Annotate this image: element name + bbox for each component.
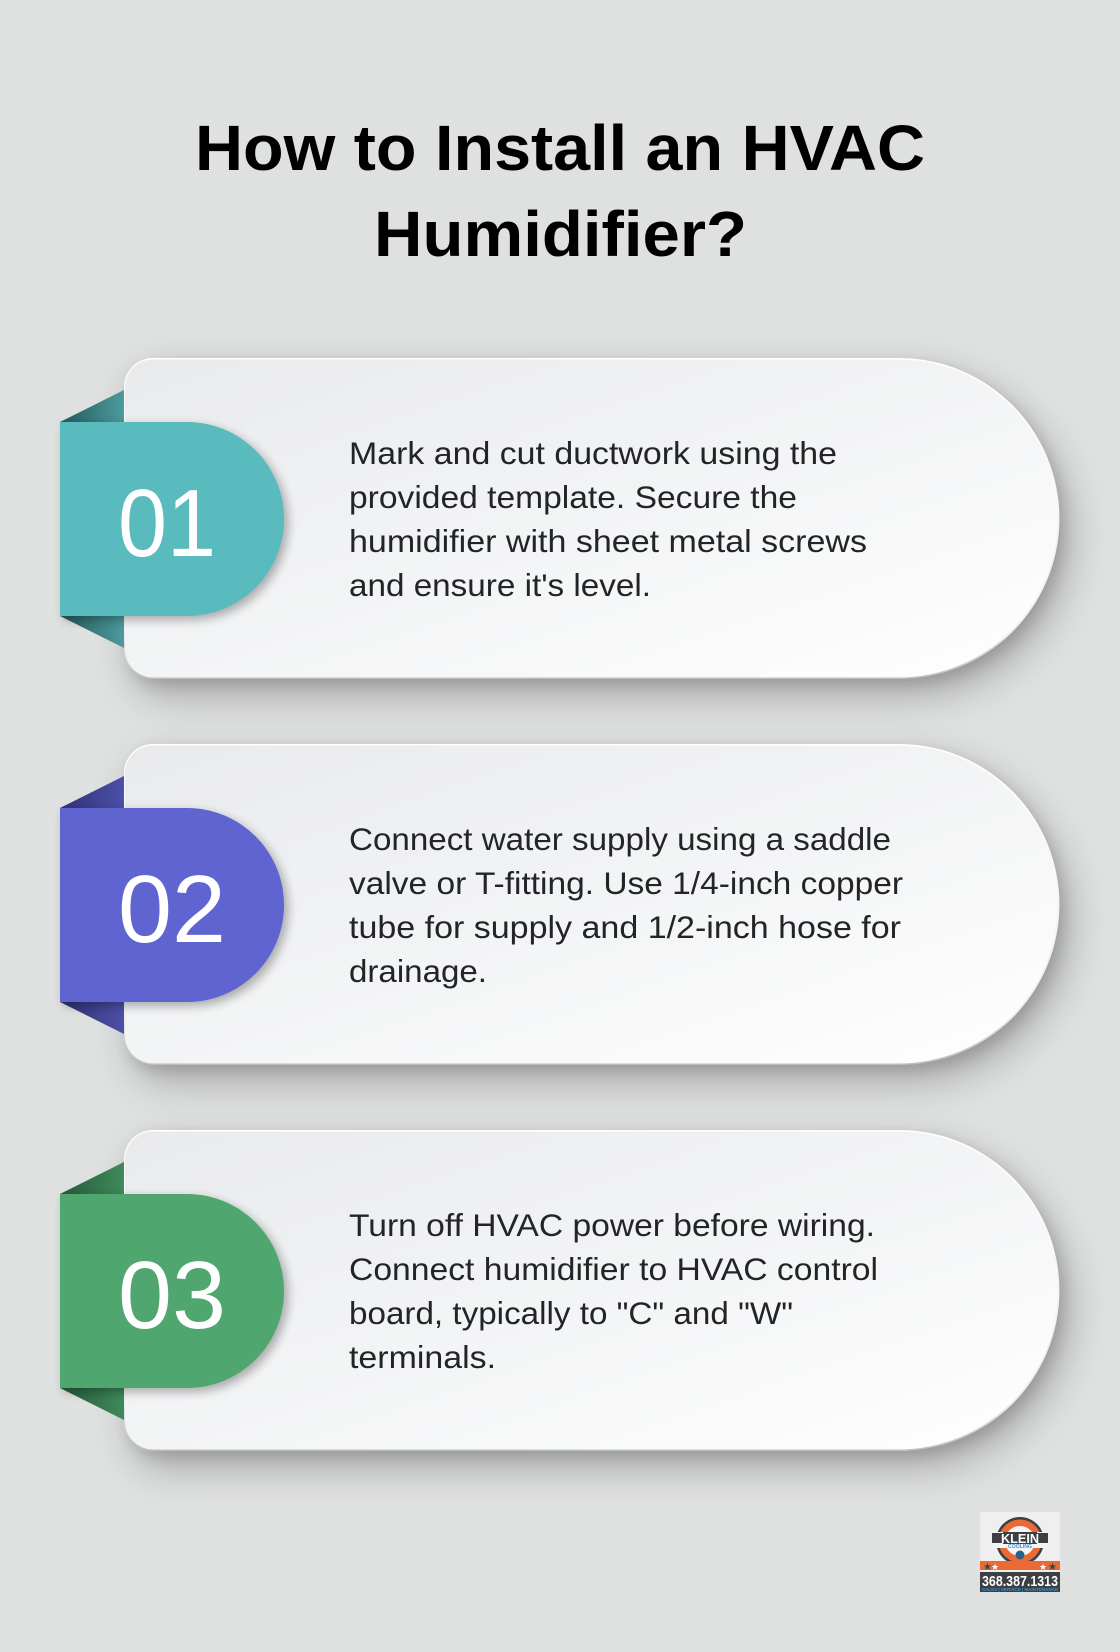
card: step 1 [124,358,1059,679]
text: step 1: Mark and cut ductwork using the [349,435,837,471]
badge: 02: 02 [118,856,226,963]
text: step 3: Connect humidifier to HVAC control [349,1251,878,1287]
title [195,112,925,270]
logo: Klein Cooling: 368.387.1313 [982,1573,1058,1590]
badge: 02 [60,808,288,1006]
badge: 03: 03 [118,1242,226,1349]
title: Humidifier? [374,198,747,270]
text: step 3: terminals. [349,1339,496,1375]
panel: step 2 [60,744,1069,1081]
title: How to Install an HVAC [195,112,925,184]
logo: Klein Cooling: ★ [1039,1562,1047,1572]
logo: Klein Cooling: COOLING [1008,1544,1032,1550]
card: step 3 [124,1130,1059,1451]
logo: Klein Cooling: ★ [983,1562,992,1573]
text: step 1: and ensure it's level. [349,567,651,603]
logo: Klein Cooling: SALES | SERVICE | MAINTENANCE [982,1587,1058,1592]
logo: Klein Cooling: ★ [991,1562,999,1572]
text: step 2: valve or T-fitting. Use 1/4-inch copper [349,865,903,901]
fold: step 3 ribbon [60,1162,124,1420]
badge: 01: 01 [118,470,216,577]
text: step 2 [349,821,903,989]
fold: step 2 ribbon [60,776,124,1034]
text: step 1: humidifier with sheet metal screws [349,523,867,559]
card: step 2 [124,744,1059,1065]
text: step 3: board, typically to "C" and "W" [349,1295,793,1331]
fold: step 1 ribbon [60,390,124,648]
panel: step 3 [60,1130,1069,1467]
text: step 2: Connect water supply using a saddle [349,821,891,857]
panel: step 1 [60,358,1069,695]
text: step 2: tube for supply and 1/2-inch hose for [349,909,901,945]
text: step 3: Turn off HVAC power before wiring. [349,1207,875,1243]
text: step 3 [349,1207,878,1375]
logo: Klein Cooling [980,1512,1060,1592]
text: step 1 [349,435,867,603]
text: step 1: provided template. Secure the [349,479,797,515]
badge: 01 [60,422,288,620]
badge: 03 [60,1194,288,1392]
text: step 2: drainage. [349,953,487,989]
logo: Klein Cooling: ★ [1048,1562,1057,1573]
logo: Klein Cooling: KLEIN [1001,1531,1039,1546]
